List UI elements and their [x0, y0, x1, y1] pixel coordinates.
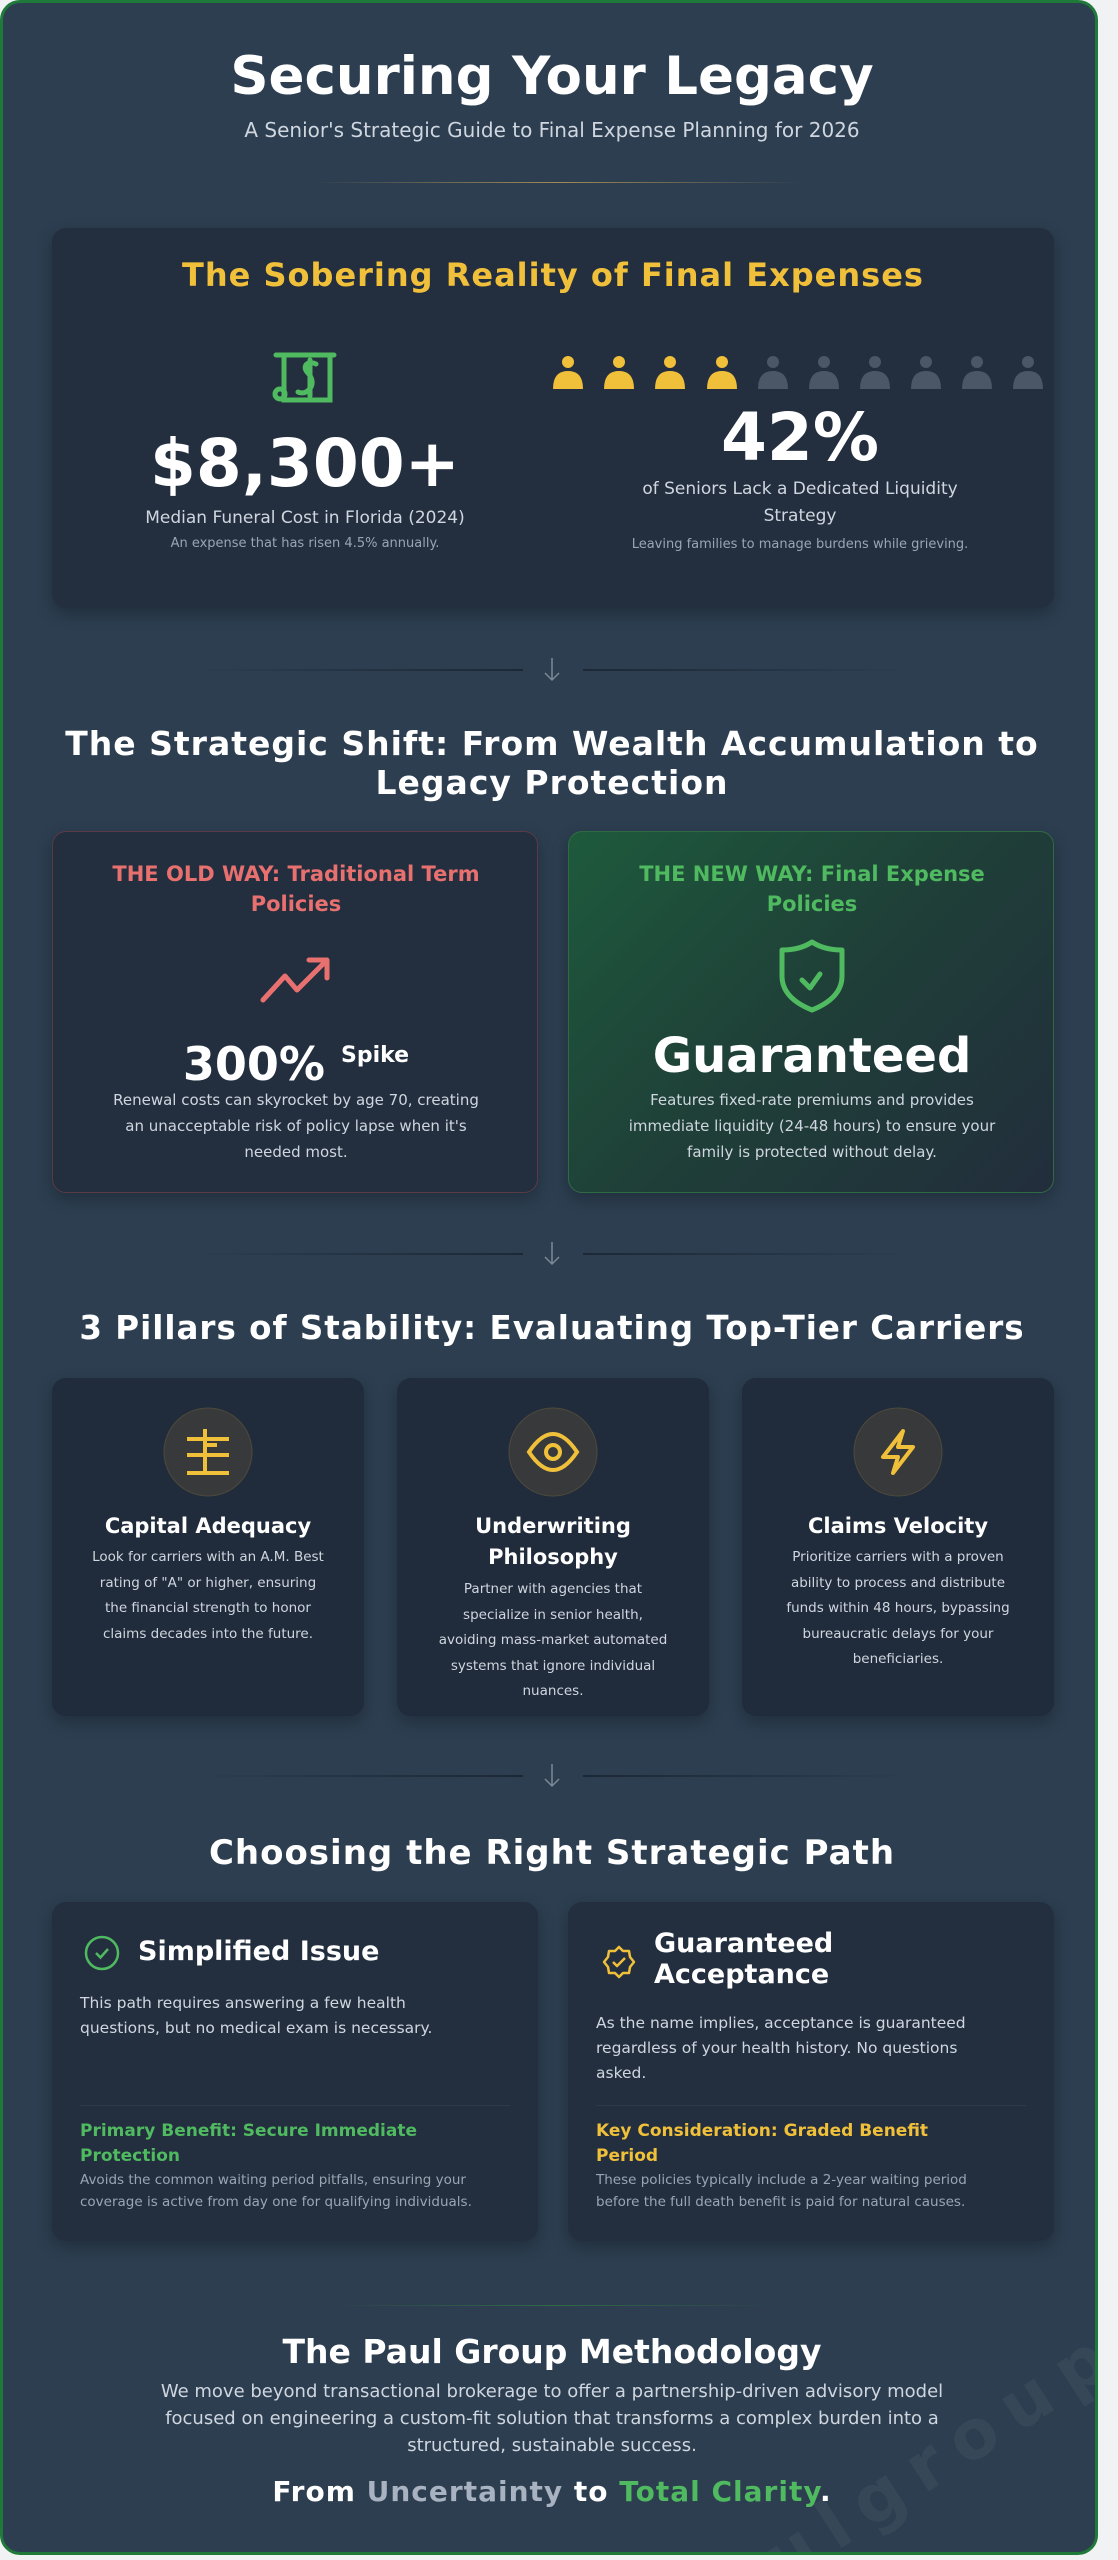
- icon: pillar: [164, 1408, 252, 1496]
- stat: funeral cost: $8,300+: [150, 425, 460, 502]
- panel: guaranteed acceptance: [568, 1902, 1054, 2241]
- stat: 42%: Leaving families to manage burdens while grieving.: [632, 537, 968, 552]
- consideration: These policies typically include a 2-year waiting period before the full death benefit is paid for natural causes.: [596, 2172, 967, 2210]
- subtitle: A Senior's Strategic Guide to Final Expense Planning for 2026: [244, 118, 860, 142]
- text: needed most.: [244, 1143, 348, 1161]
- text: [113, 1091, 479, 1161]
- heading: THE OLD WAY: Traditional Term Policies: [112, 862, 480, 916]
- benefit: [80, 2121, 472, 2210]
- icon: shield check: [780, 940, 844, 1012]
- heading: pillars: 3 Pillars of Stability: Evaluating Top-Tier Carriers: [79, 1309, 1025, 1347]
- text: Prioritize carriers with a proven ability to process and distribute funds within 48 hours, bypassing bureaucratic delays for your beneficiaries.: [786, 1549, 1010, 1667]
- title: Capital Adequacy: [105, 1514, 311, 1538]
- stat: funeral cost: Median Funeral Cost in Florida (2024): [145, 508, 465, 528]
- stat: 42%: of Seniors Lack a Dedicated Liquidity Strategy: [642, 479, 958, 526]
- text: Renewal costs can skyrocket by age 70, creating: [113, 1091, 479, 1109]
- icon: lightning: [854, 1408, 942, 1496]
- panel: capital adequacy: [52, 1378, 364, 1716]
- heading: choosing path: Choosing the Right Strategic Path: [209, 1833, 895, 1873]
- heading: THE NEW WAY: Final Expense Policies: [639, 862, 985, 916]
- heading: The Sobering Reality of Final Expenses: [182, 256, 924, 294]
- panel: new way: [568, 831, 1054, 1193]
- stat: 42%: [632, 399, 968, 552]
- text: an unacceptable risk of policy lapse when it's: [125, 1117, 467, 1135]
- tagline: From Uncertainty to Total Clarity.: [272, 2475, 832, 2508]
- icon: eye: [508, 1408, 598, 1496]
- stat: 42%: 42%: [721, 399, 879, 476]
- text: As the name implies, acceptance is guaranteed regardless of your health history. No questions asked.: [596, 2014, 966, 2082]
- icon: trending up: [260, 958, 330, 1002]
- panel: sobering reality: [52, 228, 1054, 608]
- arrow divider: [296, 1764, 810, 1787]
- stat: 300%: 300% Spike: [183, 1037, 409, 1091]
- arrow divider: [296, 658, 810, 681]
- text: Look for carriers with an A.M. Best rating of "A" or higher, ensuring the financial strength to honor claims decades into the future.: [92, 1549, 324, 1642]
- heading: strategic shift: The Strategic Shift: From Wealth Accumulation to Legacy Protection: [65, 724, 1039, 802]
- icon: check circle: [84, 1936, 120, 1970]
- benefit: Avoids the common waiting period pitfalls, ensuring your coverage is active from day one for qualifying individuals.: [80, 2172, 472, 2210]
- stat: funeral cost: [145, 425, 465, 551]
- consideration: Key Consideration: Graded Benefit Period: [596, 2121, 928, 2166]
- icon: money bag: [272, 352, 336, 402]
- title: Simplified Issue: [138, 1936, 379, 1967]
- title: Claims Velocity: [808, 1514, 988, 1538]
- text: methodology: We move beyond transactional brokerage to offer a partnership-driven advisory model focused on engineering a custom-fit solution that transforms a complex burden into a structured, sustainable success.: [161, 2381, 943, 2456]
- consideration: [596, 2121, 967, 2210]
- text: Partner with agencies that specialize in senior health, avoiding mass-market automated systems that ignore individual nuances.: [439, 1581, 667, 1699]
- title: Underwriting Philosophy: [475, 1514, 631, 1569]
- stat: funeral cost: An expense that has risen 4.5% annually.: [171, 536, 439, 551]
- panel: old way: [52, 831, 538, 1193]
- text: Features fixed-rate premiums and provides immediate liquidity (24-48 hours) to ensure your family is protected without delay.: [629, 1091, 995, 1161]
- text: This path requires answering a few health questions, but no medical exam is necessary.: [80, 1994, 432, 2037]
- panel: underwriting: [397, 1378, 709, 1716]
- panel: claims velocity: [742, 1378, 1054, 1716]
- arrow divider: [296, 1242, 810, 1265]
- icon: people row: [553, 356, 1043, 389]
- icon: badge check: [602, 1946, 636, 1978]
- heading: methodology: The Paul Group Methodology: [283, 2332, 821, 2371]
- panel: simplified issue: [52, 1902, 538, 2241]
- stat: guaranteed: Guaranteed: [653, 1028, 971, 1084]
- title: Guaranteed Acceptance: [654, 1928, 833, 1990]
- title: Securing Your Legacy: [230, 46, 874, 107]
- benefit: Primary Benefit: Secure Immediate Protection: [80, 2121, 417, 2166]
